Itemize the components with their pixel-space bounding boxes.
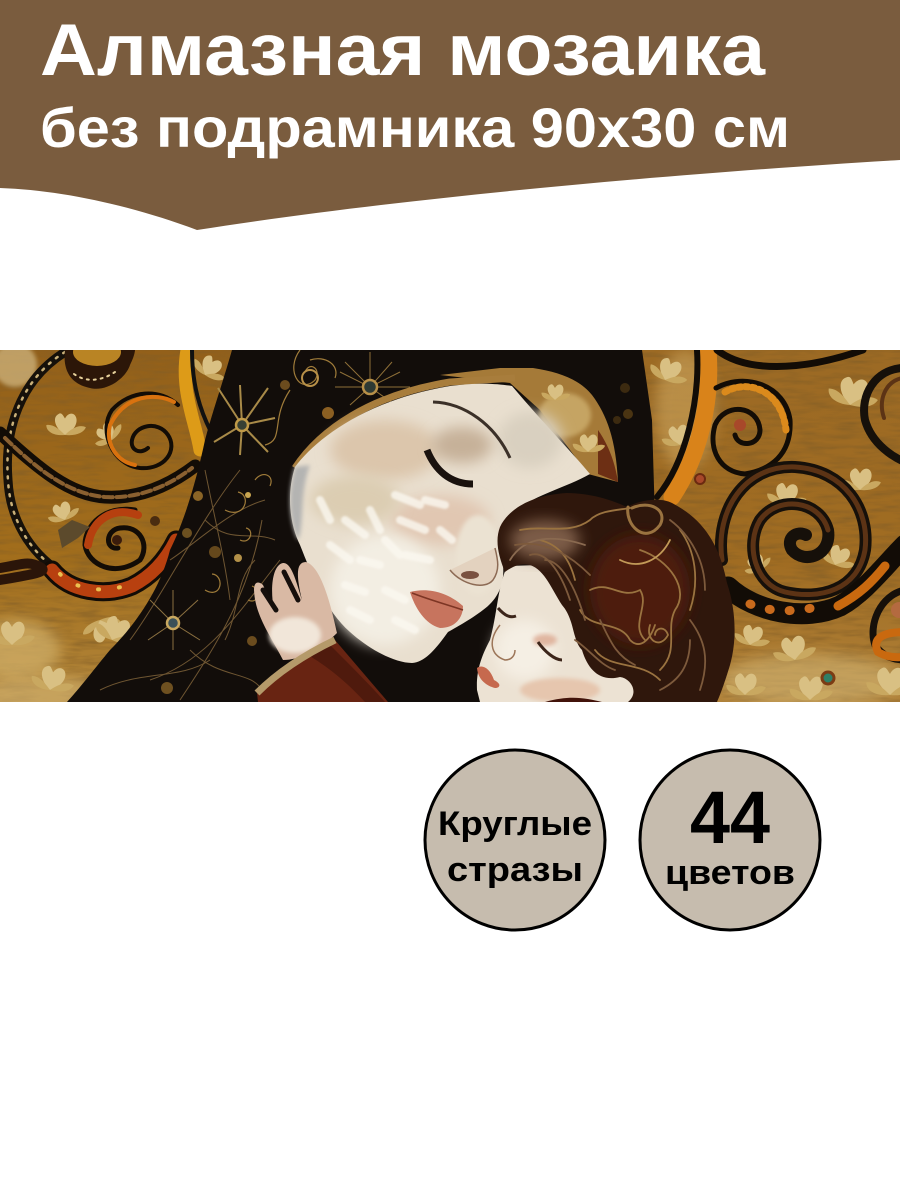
title: Алмазная мозаика: [40, 10, 767, 91]
painting: right ornamental swirls: [657, 350, 900, 684]
face: soft shading: [330, 420, 440, 480]
painting: red sleeve: [257, 640, 388, 702]
face: eyebrow: [433, 402, 510, 458]
face: closed eye: [427, 450, 473, 484]
painting: gold hood lining: [295, 368, 618, 482]
badge: round rhinestones: [425, 750, 605, 930]
child: nose: [492, 625, 515, 660]
badge number: 44: 44: [690, 776, 770, 859]
face: lips: [410, 590, 463, 628]
swirl: orange scalloped arc: [672, 350, 709, 497]
hair: highlight strands: [510, 505, 705, 690]
painting: mother and child: [0, 338, 900, 713]
band: dotted black ribbon: [728, 545, 900, 614]
badge text: Круглые: Круглые: [438, 805, 592, 843]
painting: child's curly hair: [498, 493, 735, 702]
swirl: upper orange spiral: [107, 394, 178, 468]
veil: gold star left: [214, 385, 275, 455]
badge text: стразы: стразы: [447, 851, 583, 889]
face: nose: [450, 548, 498, 585]
painting: child's face: [477, 565, 641, 702]
header banner: [0, 0, 900, 230]
infographic canvas: [0, 0, 900, 932]
painting: dark veil: [67, 350, 655, 702]
swirl: far right spirals: [864, 368, 900, 462]
face: white brush strokes: [320, 495, 452, 630]
painting: mother's hand: [254, 562, 337, 660]
swirl: golden scallop: [185, 350, 200, 450]
badge: 44 colours: [640, 750, 820, 930]
veil: gold star bottom: [148, 590, 200, 650]
child: lips: [477, 666, 499, 688]
child: closed eyes: [498, 608, 562, 660]
painting: left ornamental swirls: [0, 338, 211, 592]
painting: gold background: [0, 343, 900, 713]
painting: mother's face: [290, 384, 590, 663]
flower: brown rosette: [65, 350, 135, 389]
swirl: upper orange spiral: [713, 381, 790, 474]
badge text: цветов: цветов: [665, 854, 795, 892]
veil: gold star top: [335, 352, 410, 405]
swirl: large brown spiral: [721, 467, 866, 595]
swirl: lower orange spiral: [85, 509, 144, 569]
subtitle: без подрамника 90х30 см: [40, 96, 790, 159]
dots on orange band: [60, 574, 130, 589]
